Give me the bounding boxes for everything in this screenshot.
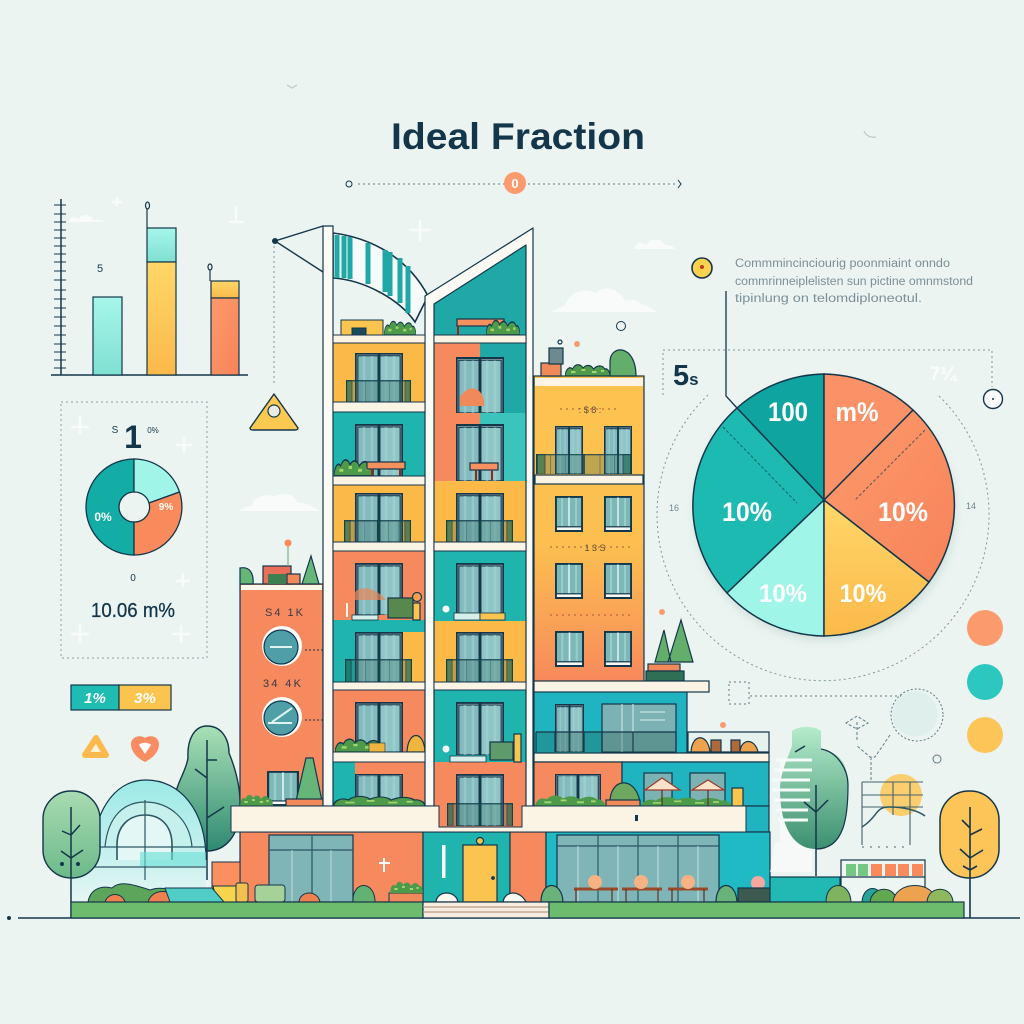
icon: heart badge — [131, 736, 159, 762]
yellow door — [463, 838, 497, 902]
text block: Commmincinciourig poonmiaint onndo — [735, 258, 950, 270]
floor slabs — [333, 335, 526, 762]
facade labels — [550, 409, 633, 615]
building: right yellow tower — [534, 322, 644, 682]
pie side labels: 5s — [673, 360, 699, 392]
lobby glazing — [269, 835, 353, 902]
right shrubs — [826, 886, 953, 902]
slice: orange top — [824, 374, 913, 500]
pie side labels: 7¼ — [930, 364, 958, 385]
arched roof banner — [333, 233, 428, 322]
bar chart: 5 — [97, 263, 103, 275]
ground line — [7, 916, 1020, 920]
upper terrace — [688, 732, 769, 752]
bar one — [93, 297, 122, 375]
building: ground floor — [240, 832, 806, 902]
small decorative birds and sun — [287, 85, 876, 137]
right sketch: dashed diagram — [729, 682, 943, 780]
floor furniture — [334, 460, 374, 476]
building: right yellow tower: 1 3 S — [584, 543, 606, 553]
right fading building stripes — [770, 761, 812, 872]
lawn and stairs — [71, 902, 964, 918]
pie side labels: 14 — [966, 501, 976, 511]
icon: ring marker — [984, 390, 1002, 408]
legend bar: 3% — [134, 690, 156, 707]
windows — [555, 426, 583, 474]
round window bottom — [262, 697, 302, 737]
tree: large left — [175, 726, 240, 880]
panel: donut stat: 10.06 m% — [91, 600, 175, 622]
pie labels: m% — [836, 397, 878, 427]
pointer line into pie — [726, 291, 737, 408]
legend bar — [71, 685, 171, 710]
windows — [355, 353, 403, 402]
rooftop plants — [541, 340, 636, 376]
tower label: S4 1K — [265, 607, 304, 619]
title: Ideal Fraction — [391, 116, 645, 157]
top room furniture — [457, 319, 520, 335]
round window top — [262, 626, 302, 666]
panel: donut stat: 1 — [124, 419, 142, 455]
title divider with marker — [346, 172, 681, 194]
building: lower teal wing — [534, 681, 769, 832]
bar two — [146, 202, 176, 375]
balconies — [346, 380, 411, 402]
umbrellas — [645, 778, 724, 806]
bar chart — [51, 199, 248, 375]
building: left orange tower — [240, 540, 323, 808]
bar three — [208, 264, 239, 375]
pie labels: 10% — [840, 580, 886, 608]
windows — [456, 357, 504, 413]
cone shrub — [296, 758, 322, 801]
panel: donut stat: S — [112, 425, 119, 436]
pie labels: 10% — [722, 497, 772, 527]
building: right yellow tower: : $ 8 : — [579, 405, 601, 415]
text block: tipinlung on telomdiploneotul. — [735, 293, 922, 305]
rooftop terrace — [341, 320, 416, 335]
tree: small left — [43, 791, 100, 918]
chart: main pie — [657, 350, 992, 681]
legend bar: 1% — [84, 690, 106, 707]
slice: light teal — [727, 500, 824, 636]
text block: commrinneiplelisten sun pictine omnmstond — [735, 276, 973, 288]
balcony slab — [535, 475, 643, 484]
lower window — [267, 771, 299, 806]
right sketch: line chart — [862, 774, 925, 847]
floor fills — [333, 343, 425, 806]
tree: yellow — [940, 791, 999, 918]
pie side labels: 16 — [669, 503, 679, 513]
glass dome — [72, 780, 206, 902]
slice: dark teal — [737, 374, 824, 500]
front shrubs — [541, 882, 806, 902]
rooftop — [240, 540, 319, 584]
donut chart: 0% — [94, 510, 112, 524]
panel: donut stat — [61, 402, 207, 658]
pie labels: 10% — [759, 580, 807, 608]
pie labels: 100 — [768, 397, 808, 427]
cafe tables — [574, 875, 708, 902]
pie side labels — [669, 360, 976, 513]
white pillars and gable — [323, 226, 533, 806]
decorative clouds and sparkles — [68, 197, 675, 643]
second tower label: 34 4K — [263, 678, 302, 690]
low right teal block with sign — [770, 860, 925, 902]
pie labels: 10% — [878, 497, 928, 527]
building: central right column — [434, 245, 526, 828]
slice: teal — [693, 408, 824, 593]
crane line and warning triangle — [250, 226, 323, 430]
text block — [735, 258, 973, 305]
donut chart: 9% — [159, 502, 173, 513]
balconies — [446, 520, 513, 542]
legend dots — [967, 610, 1003, 753]
building: central left column — [333, 343, 425, 806]
slice: orange — [824, 410, 954, 582]
pie labels — [722, 397, 928, 608]
title divider with marker: 0 — [511, 176, 519, 191]
left garden — [88, 858, 423, 902]
panel: donut stat: 0 — [130, 573, 136, 584]
tree: right green — [772, 727, 848, 876]
terrace slabs — [231, 806, 746, 832]
slice: yellow — [824, 500, 929, 636]
floor furniture — [460, 388, 484, 406]
icon: triangle — [85, 738, 106, 755]
right side planter with cones — [646, 609, 693, 681]
icon: yellow marker — [692, 258, 712, 278]
cafe glazing — [557, 835, 719, 902]
donut chart — [86, 459, 182, 555]
panel: donut stat: 0% — [147, 426, 159, 435]
